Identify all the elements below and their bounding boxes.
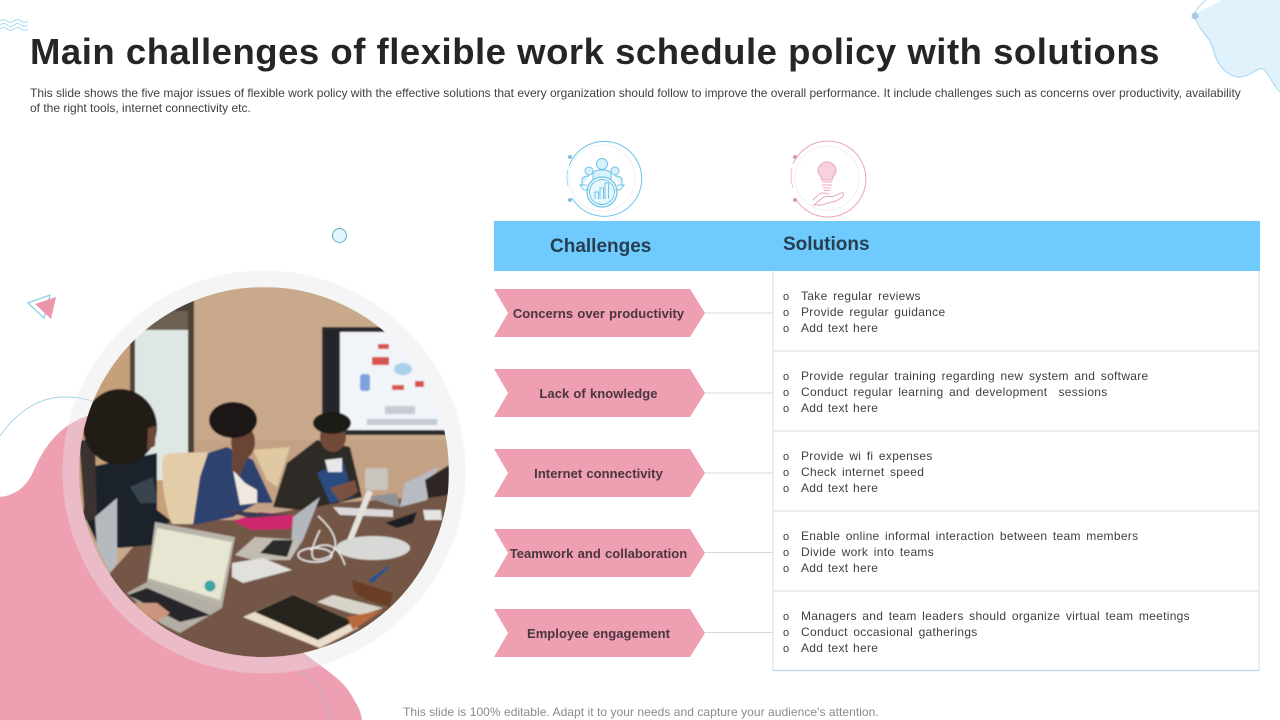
challenge: employee engagement	[494, 609, 705, 657]
solutions row 1: Provide regular guidance	[801, 305, 945, 319]
notebook	[243, 595, 358, 648]
challenge: teamwork and collaboration	[494, 529, 705, 577]
solutions row 4: Add text here	[801, 561, 878, 575]
solutions row 5: o	[783, 627, 789, 639]
solutions row 1: o	[783, 291, 789, 303]
solutions row 2: Add text here	[801, 401, 878, 415]
arc: left thin blue	[0, 397, 96, 436]
challenge: lack of knowledge: Lack of knowledge	[539, 386, 658, 401]
laptop at back right	[400, 467, 438, 507]
heading: solutions: Solutions	[783, 234, 870, 255]
solutions row 1	[783, 289, 945, 335]
subtitle description: of the right tools, internet connectivity etc.	[30, 101, 251, 115]
solutions row 3: o	[783, 483, 789, 495]
solutions row 3: Check internet speed	[801, 465, 924, 479]
challenge: concerns over productivity	[494, 289, 705, 337]
meeting photo	[79, 287, 452, 660]
solutions row 1: o	[783, 307, 789, 319]
challenge: internet connectivity	[494, 449, 705, 497]
solutions row 4: o	[783, 563, 789, 575]
solutions row 4: Enable online informal interaction between team members	[801, 529, 1138, 543]
solutions row 5: Conduct occasional gatherings	[801, 625, 978, 639]
solutions row 3	[783, 449, 933, 495]
solutions row 3: Add text here	[801, 481, 878, 495]
solutions row 4: Divide work into teams	[801, 545, 934, 559]
person left dark	[83, 453, 170, 548]
solutions row 4: o	[783, 547, 789, 559]
solutions row 2: o	[783, 371, 789, 383]
keyboard and mouse	[232, 558, 292, 583]
solutions row 2: o	[783, 387, 789, 399]
solutions row 4	[783, 529, 1138, 575]
heading: challenges: Challenges	[550, 236, 651, 257]
solutions row 3: o	[783, 451, 789, 463]
tablet and hand	[317, 595, 383, 615]
photo: team meeting in ring	[62, 270, 466, 720]
solutions row 1: Add text here	[801, 321, 878, 335]
connector lines	[705, 312, 772, 633]
left wall and window	[79, 344, 169, 517]
table header bar	[494, 221, 1260, 271]
icon: solutions bulb in hand	[790, 140, 866, 218]
pink folder	[233, 512, 298, 530]
black pouch	[385, 512, 417, 528]
solutions row 5: Add text here	[801, 641, 878, 655]
challenge: internet connectivity: Internet connectivity	[534, 466, 663, 481]
cables	[298, 516, 345, 565]
wall right	[194, 287, 449, 517]
lamp	[365, 468, 388, 490]
subtitle description: This slide shows the five major issues of flexible work policy with the effective solutions that every organization should follow to improve the overall performance. It include challenges such as concerns over productivity, availability	[30, 86, 1241, 100]
solutions row 4: o	[783, 531, 789, 543]
waves: top left	[0, 20, 28, 30]
challenge: lack of knowledge	[494, 369, 705, 417]
arc inside ring lower right	[300, 672, 331, 720]
challenge: teamwork and collaboration: Teamwork and collaboration	[510, 546, 687, 561]
photo ring	[71, 279, 457, 665]
table	[79, 495, 449, 660]
solutions row 5	[783, 609, 1190, 655]
title: Main challenges of flexible work schedule policy with solutions	[30, 31, 1160, 72]
solutions row 2: Conduct regular learning and development sessions	[801, 385, 1108, 399]
solutions row 2: o	[783, 403, 789, 415]
circle: small blue	[332, 228, 346, 242]
person center blue jacket	[193, 447, 273, 525]
blob: top right light blue	[1192, 0, 1280, 92]
challenge: concerns over productivity: Concerns over productivity	[513, 306, 684, 321]
triangles: left decorative	[28, 295, 56, 319]
right edge person and paper	[425, 465, 449, 498]
blob: bottom left pink	[0, 415, 362, 720]
solutions row 1: Take regular reviews	[801, 289, 921, 303]
middle laptop	[290, 497, 320, 560]
footer note: This slide is 100% editable. Adapt it to your needs and capture your audience's attention.	[403, 705, 879, 719]
solutions row 5: o	[783, 643, 789, 655]
papers at back	[333, 507, 393, 517]
solutions row 5: Managers and team leaders should organize virtual team meetings	[801, 609, 1190, 623]
solutions row 2	[783, 369, 1149, 415]
solutions row 5: o	[783, 611, 789, 623]
solutions row 3: Provide wi fi expenses	[801, 449, 933, 463]
subtitle description	[30, 86, 1241, 115]
front laptop	[147, 522, 235, 608]
solutions row 1: o	[783, 323, 789, 335]
left laptop lid	[95, 498, 117, 573]
whiteboard screen	[322, 327, 452, 435]
icon: challenges team chart	[566, 140, 642, 217]
solutions row 3: o	[783, 467, 789, 479]
table frame and row lines	[772, 271, 1260, 672]
solutions row 2: Provide regular training regarding new system and software	[801, 369, 1149, 383]
person right dark jacket	[273, 440, 362, 510]
challenge: employee engagement: Employee engagement	[527, 626, 670, 641]
chairs	[162, 452, 213, 524]
